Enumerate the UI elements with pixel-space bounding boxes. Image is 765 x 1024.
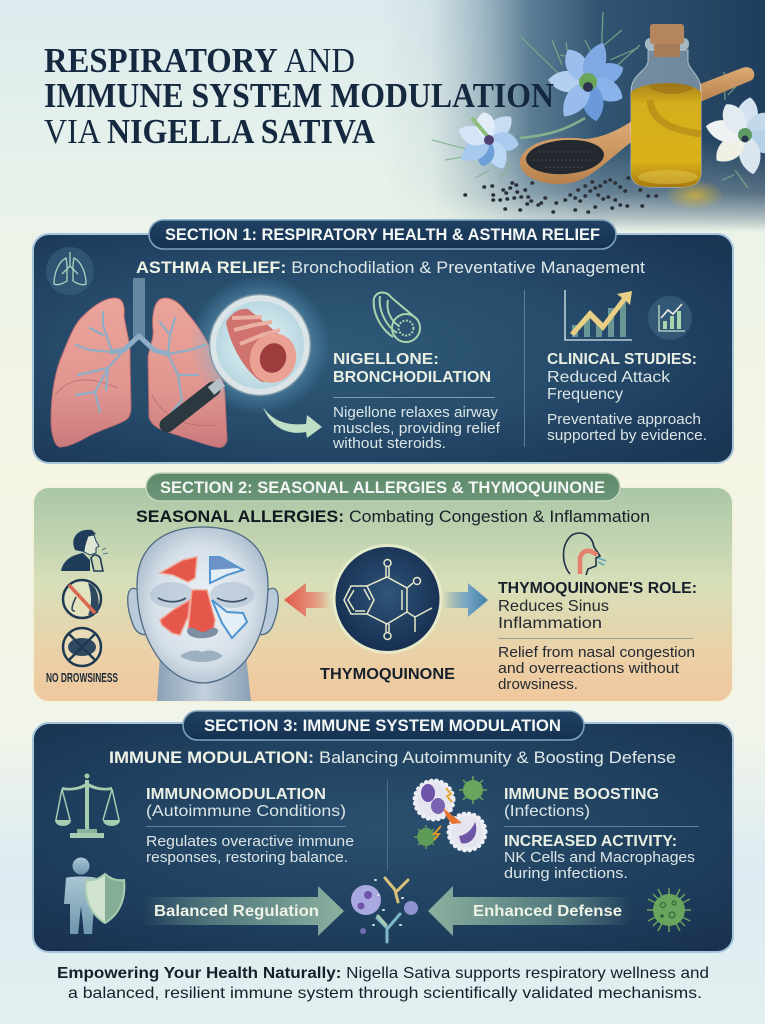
icon: light blue flower [456, 110, 520, 173]
text block: clinical studies [547, 351, 707, 444]
text block: immune boosting: INCREASED ACTIVITY: [504, 833, 677, 850]
nose base [187, 628, 218, 638]
text block: immune boosting: (Infections) [504, 803, 590, 820]
panel: section 2 seasonal allergies [33, 473, 733, 702]
text block: nigellone: muscles, providing relief [333, 420, 501, 437]
label: thymoquinone: THYMOQUINONE [320, 666, 455, 683]
arrow: enhanced defense [428, 886, 632, 936]
icon: no nose symbol [63, 580, 101, 618]
title: VIA NIGELLA SATIVA [44, 112, 376, 151]
icon: oil bottle [631, 24, 701, 187]
section 2 pill heading: SECTION 2: SEASONAL ALLERGIES & THYMOQUINONE [160, 479, 605, 497]
icon: wooden spoon [520, 67, 754, 184]
text block: thymoquinone role: Relief from nasal congestion [498, 644, 695, 661]
footer text: a balanced, resilient immune system through scientifically validated mechanisms. [68, 985, 702, 1002]
text block: nigellone: without steroids. [332, 435, 446, 452]
title [44, 41, 554, 151]
icon: chart badge [648, 296, 692, 340]
icon: lungs badge [46, 247, 94, 295]
text block: thymoquinone role: Inflammation [498, 615, 602, 632]
section 3 pill heading: SECTION 3: IMMUNE SYSTEM MODULATION [204, 717, 561, 735]
panel: section 3 immune modulation [33, 711, 733, 952]
section 2 subheading: SEASONAL ALLERGIES: Combating Congestion & Inflammation [136, 508, 650, 526]
icon: flower stems and foliage [432, 12, 748, 188]
header photo: nigella flowers, oil bottle and spoon of seeds [380, 0, 765, 232]
arrow: balanced regulation: Balanced Regulation [154, 903, 319, 920]
text block: immune boosting: NK Cells and Macrophages [504, 849, 695, 866]
icon: person with shield [64, 858, 124, 934]
icon: white nigella flower [704, 96, 765, 177]
mouth [180, 651, 223, 662]
text block: immunomodulation [146, 786, 354, 866]
text block: thymoquinone role: Reduces Sinus [498, 598, 609, 615]
sinus right clear [210, 557, 247, 638]
text block: immune boosting [504, 786, 699, 882]
text block: clinical studies: Reduced Attack [547, 369, 671, 386]
text block: immunomodulation: responses, restoring balance. [146, 849, 348, 866]
chart: rising arrow with bars [565, 290, 632, 340]
eye sockets [150, 582, 194, 608]
eyes [158, 598, 247, 602]
section 1 subheading: ASTHMA RELIEF: Bronchodilation & Preventative Management [136, 259, 645, 277]
title: RESPIRATORY AND [44, 41, 355, 80]
text block: immune boosting: IMMUNE BOOSTING [504, 786, 659, 803]
text block: clinical studies: CLINICAL STUDIES: [547, 351, 697, 368]
illustration: magnifier over airway [167, 275, 330, 425]
text block: immunomodulation: IMMUNOMODULATION [146, 786, 326, 803]
text block: thymoquinone role: drowsiness. [498, 676, 578, 693]
illustration: cells and antibodies [351, 878, 418, 942]
section 1 pill heading [149, 220, 616, 249]
icon: virus [647, 888, 691, 932]
text block: nigellone: BRONCHODILATION [333, 369, 491, 386]
text block: thymoquinone role: THYMOQUINONE'S ROLE: [498, 580, 697, 597]
section 3 subheading: IMMUNE MODULATION: Balancing Autoimmunity & Boosting Defense [109, 749, 676, 767]
text block: nigellone [332, 351, 501, 452]
text block: immunomodulation: Regulates overactive immune [146, 833, 354, 850]
text block: clinical studies: Preventative approach [547, 411, 701, 428]
icon: head with nasal passage [564, 533, 606, 575]
footer text [57, 965, 709, 1002]
reflection under bottle [665, 180, 725, 210]
icon: person sneezing [61, 530, 108, 571]
text block: nigellone: NIGELLONE: [333, 351, 439, 368]
icon: balance scale [55, 774, 120, 838]
text block: nigellone: Nigellone relaxes airway [333, 404, 499, 421]
arrow: red to left [284, 583, 330, 617]
icon: thymoquinone molecule badge [332, 544, 442, 654]
sinus left inflamed [160, 557, 215, 635]
arrow: enhanced defense: Enhanced Defense [473, 903, 622, 920]
icon: no drowsiness symbol [63, 628, 101, 666]
label: no drowsiness: NO DROWSINESS [46, 670, 118, 685]
arrow: blue to right [443, 583, 488, 617]
text block: clinical studies: supported by evidence. [547, 427, 707, 444]
title: IMMUNE SYSTEM MODULATION [44, 76, 554, 115]
section 2 pill heading [146, 473, 620, 501]
footer text: Empowering Your Health Naturally: Nigella Sativa supports respiratory wellness and [57, 965, 709, 982]
illustration: immune cells attacking pathogens [414, 776, 487, 850]
loose black seeds [465, 178, 656, 212]
text block: immunomodulation: (Autoimmune Conditions) [146, 803, 346, 820]
illustration: face with sinuses [128, 527, 278, 701]
bronchial tree [76, 312, 205, 412]
text block: thymoquinone role: and overreactions without [498, 660, 680, 677]
arrow: green curved [263, 407, 322, 438]
icon: blue nigella flower [548, 39, 627, 124]
arrow: balanced regulation [142, 886, 344, 936]
section 3 pill heading [183, 711, 584, 740]
text block: thymoquinone role [498, 580, 697, 693]
text block: immune boosting: during infections. [504, 865, 628, 882]
section 1 pill heading: SECTION 1: RESPIRATORY HEALTH & ASTHMA RELIEF [165, 226, 600, 244]
icon: airway tube [374, 293, 420, 342]
text block: clinical studies: Frequency [547, 386, 623, 403]
panel: section 1 respiratory health [33, 220, 733, 463]
illustration: lungs [51, 278, 227, 447]
spoon seeds [525, 137, 605, 177]
